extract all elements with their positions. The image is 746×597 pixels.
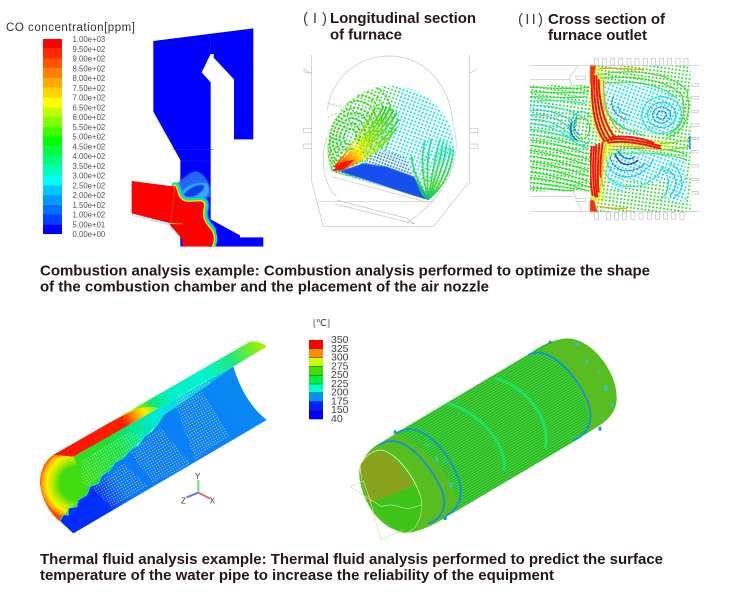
- legend: temperature scale: 250: [331, 369, 349, 381]
- panel: cross section of furnace outlet: [518, 11, 700, 219]
- legend: CO colour scale: 1.50e+02: [72, 201, 105, 210]
- right fan: [403, 138, 453, 200]
- caption: thermal fluid analysis: Thermal fluid analysis example: Thermal fluid analysis performed to predict the surface: [40, 551, 663, 568]
- vector field: base dots: [327, 86, 454, 200]
- axis triad: [181, 472, 216, 506]
- lower vortex: [605, 151, 687, 202]
- legend: CO colour scale: 1.00e+02: [72, 210, 105, 220]
- legend: CO colour scale: 1.00e+03: [72, 35, 105, 44]
- T-shaped red jet: [591, 68, 690, 208]
- end cap: [40, 455, 87, 522]
- legend: CO colour scale: 8.00e+02: [72, 74, 105, 83]
- legend: CO colour scale: 5.00e+01: [72, 220, 105, 229]
- legend: temperature scale: 150: [331, 404, 349, 416]
- left vectors: [530, 85, 594, 192]
- furnace throat: [590, 66, 597, 212]
- legend: CO colour scale: 7.50e+02: [72, 84, 105, 93]
- legend: CO colour scale: 0.00e+00: [72, 230, 106, 239]
- legend: temperature scale: [309, 319, 349, 425]
- legend: temperature scale: 275: [331, 360, 349, 372]
- chart: water pipe cylinder temperature: [350, 338, 617, 539]
- heading: cross section: Cross section of: [548, 11, 666, 28]
- heading: cross section: furnace outlet: [548, 27, 647, 44]
- caption: thermal fluid analysis: temperature of the water pipe to increase the reliability of the equipment: [40, 567, 554, 584]
- legend: CO colour scale: 7.00e+02: [72, 94, 105, 102]
- front opening: [360, 450, 422, 533]
- heading: longitudinal section: [303, 10, 476, 44]
- legend: CO colour scale: 3.00e+02: [72, 172, 105, 180]
- legend: CO colour scale: 4.00e+02: [72, 152, 105, 161]
- green stiffener rings: [447, 378, 546, 471]
- legend: CO colour scale: [43, 35, 106, 239]
- legend: CO colour scale: 3.50e+02: [72, 162, 105, 171]
- legend: temperature scale: 325: [331, 343, 349, 355]
- axis triad: X: [210, 497, 216, 506]
- legend: CO colour scale: 2.00e+02: [72, 191, 105, 200]
- axis triad: Z: [181, 497, 186, 506]
- legend: CO colour scale: 9.50e+02: [72, 45, 105, 54]
- lower surface: [60, 367, 267, 533]
- front section: [359, 433, 457, 533]
- heading: longitudinal section: (I): [303, 10, 327, 27]
- legend: CO colour scale: 2.50e+02: [72, 181, 105, 190]
- chart: outlet velocity vectors: [530, 58, 700, 219]
- legend: CO colour scale: 6.00e+02: [72, 113, 105, 122]
- heading: cross section: [518, 11, 666, 44]
- heading: longitudinal section: of furnace: [330, 26, 402, 44]
- heading: CO concentration: CO concentration[ppm]: [6, 22, 135, 34]
- chart: half cylinder surface temperature: [40, 341, 267, 533]
- legend: CO colour scale: 4.50e+02: [72, 142, 105, 151]
- furnace outline: [303, 55, 478, 227]
- legend: CO colour scale: 5.50e+02: [72, 123, 105, 132]
- cylinder body: [359, 339, 617, 533]
- rear section: [542, 338, 617, 432]
- chart: furnace velocity vectors: [303, 55, 478, 227]
- legend: CO colour scale: 9.00e+02: [72, 54, 105, 64]
- vortex left: [328, 87, 393, 178]
- inner surface: [60, 367, 233, 522]
- caption: combustion analysis: of the combustion chamber and the placement of the air nozzle: [40, 278, 489, 296]
- caption: thermal fluid analysis: [40, 551, 663, 584]
- caption: combustion analysis: [40, 262, 650, 296]
- legend: temperature scale: 350: [331, 334, 349, 346]
- blue rings: [379, 353, 590, 524]
- legend: CO colour scale: 6.50e+02: [72, 103, 105, 112]
- outline and fins: [530, 58, 700, 219]
- jet streamlines: [335, 107, 398, 169]
- hot zone on shell: [53, 407, 158, 457]
- chart: furnace CO contour: [132, 28, 263, 247]
- legend: CO colour scale: 5.00e+02: [72, 132, 105, 142]
- pale outline lines: [350, 481, 422, 539]
- panel: CO concentration contour: [6, 22, 263, 247]
- right vectors: [590, 66, 691, 212]
- blue wedge: [363, 150, 413, 177]
- legend: temperature scale: 175: [331, 396, 349, 408]
- shell top strip: [53, 341, 267, 457]
- legend: temperature scale: [℃]: [313, 319, 330, 329]
- legend: temperature scale: 300: [331, 352, 349, 364]
- caption: combustion analysis: Combustion analysis example: Combustion analysis performed to optimize the shape: [40, 262, 650, 280]
- heading: longitudinal section: Longitudinal section: [330, 10, 476, 27]
- legend: temperature scale: 200: [331, 387, 349, 399]
- axis triad: Y: [195, 472, 201, 481]
- upper vortex: [601, 83, 682, 134]
- legend: temperature scale: 40: [331, 413, 343, 425]
- panel: longitudinal section of furnace: [303, 10, 478, 227]
- heading: cross section: (II): [518, 11, 543, 28]
- legend: temperature scale: 225: [331, 378, 349, 390]
- dotted water pipe bands: [175, 392, 230, 460]
- legend: CO colour scale: 8.50e+02: [72, 64, 105, 73]
- ring brackets: [394, 341, 601, 520]
